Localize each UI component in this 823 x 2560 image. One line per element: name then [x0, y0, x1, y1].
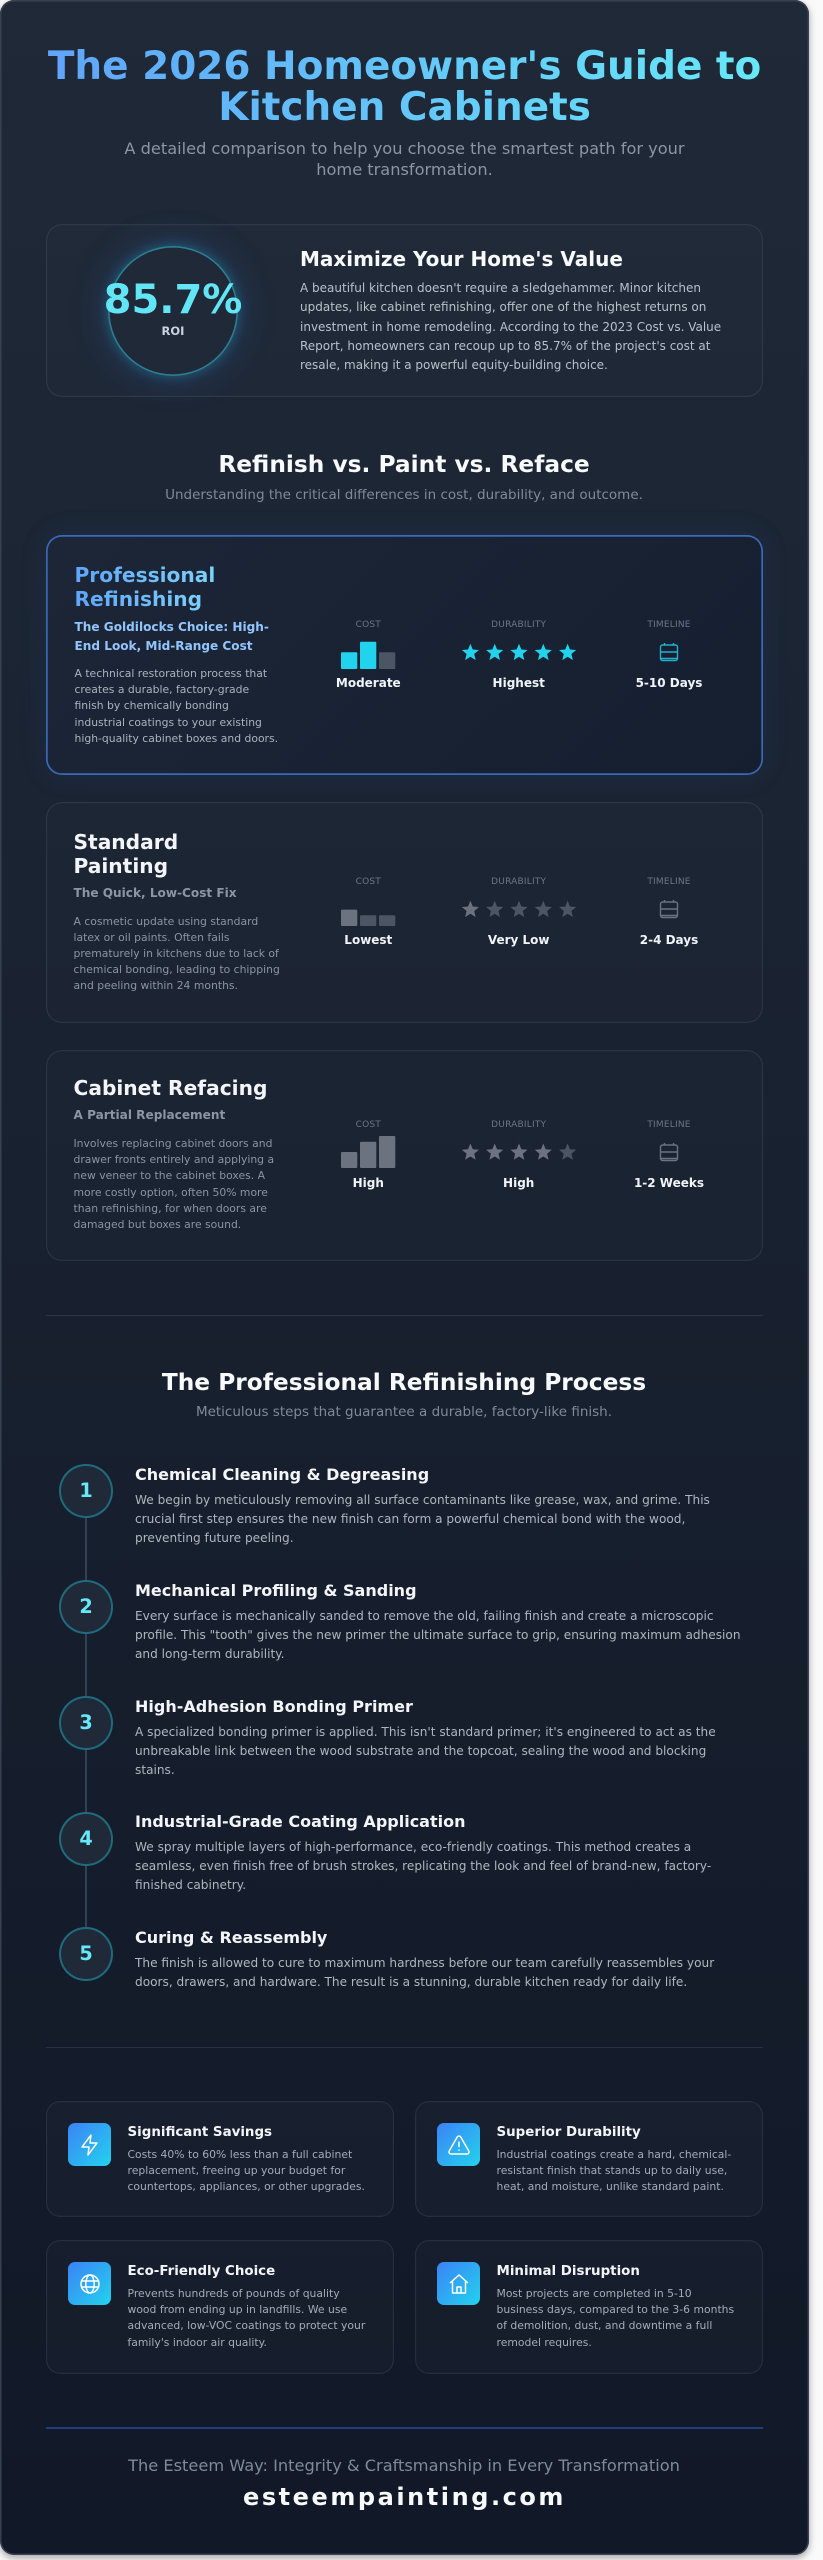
option description: high-quality cabinet boxes and doors.: [74, 732, 278, 745]
option description: new veneer to the cabinet boxes. A: [74, 1169, 265, 1182]
panel: superior durability: [415, 2101, 763, 2217]
heading: comparison: Refinish vs. Paint vs. Reface: [218, 451, 590, 478]
benefit title: Minimal Disruption: [496, 2264, 640, 2279]
benefit text: of demolition, dust, and downtime a full: [496, 2319, 712, 2332]
step text: [135, 1724, 716, 1776]
metric: cost: High: [353, 1176, 384, 1190]
benefit text: business days, compared to the 3-6 months: [496, 2303, 734, 2316]
benefit text: [128, 2148, 365, 2193]
benefit text: Industrial coatings create a hard, chemical-: [496, 2148, 731, 2161]
benefit text: resistant finish that stands up to daily use,: [496, 2164, 727, 2177]
step text: We spray multiple layers of high-performance, eco-friendly coatings. This method creates a: [135, 1840, 691, 1854]
option description: [74, 1137, 274, 1231]
option description: A cosmetic update using standard: [74, 915, 258, 928]
step text: unbreakable link between the wood substrate and the topcoat, sealing the wood and blocking: [135, 1744, 706, 1758]
heading: process: The Professional Refinishing Process: [162, 1369, 646, 1396]
metric: cost: [341, 1120, 396, 1190]
metric: durability: High: [503, 1176, 534, 1190]
option tagline: End Look, Mid-Range Cost: [74, 638, 253, 652]
ROI text: resale, making it a powerful equity-building choice.: [300, 358, 608, 372]
subtitle: home transformation.: [316, 160, 493, 178]
metric: timeline: 5-10 Days: [636, 676, 702, 690]
step title: High-Adhesion Bonding Primer: [135, 1697, 413, 1716]
metric: cost: Moderate: [336, 676, 401, 690]
ROI circle: [108, 246, 238, 376]
metric: durability: DURABILITY: [491, 620, 546, 630]
panel: minimal disruption: [415, 2240, 763, 2374]
metric: cost: COST: [356, 1120, 381, 1130]
step number: 3: [79, 1711, 93, 1734]
step 3: [59, 1696, 716, 1776]
metric: cost: COST: [356, 877, 381, 887]
option description: drawer fronts entirely and applying a: [74, 1153, 274, 1166]
ROI number: 85.7%: [104, 277, 242, 323]
option tagline: The Goldilocks Choice: High-: [74, 620, 269, 634]
option title: Painting: [74, 854, 168, 878]
panel: eco-friendly choice: [46, 2240, 394, 2374]
metric: durability: [462, 620, 576, 690]
step title: Curing & Reassembly: [135, 1928, 327, 1947]
benefit title: Eco-Friendly Choice: [128, 2264, 275, 2279]
metric: durability: DURABILITY: [491, 877, 546, 887]
benefit text: Most projects are completed in 5-10: [496, 2287, 692, 2300]
step number: [59, 1464, 113, 1518]
option title: Standard: [74, 830, 178, 854]
icon: lightning bolt: [68, 2123, 111, 2166]
metric: cost: COST: [356, 620, 381, 630]
metric: durability: [462, 877, 576, 947]
option title: [74, 563, 215, 612]
metric: timeline: TIMELINE: [647, 877, 691, 887]
panel: cabinet refacing: [46, 1050, 763, 1260]
metric: durability: Very Low: [488, 933, 550, 947]
step text: [134, 1956, 714, 1988]
benefit text: replacement, freeing up your budget for: [128, 2164, 345, 2177]
metric: cost: Lowest: [344, 933, 392, 947]
ROI text: A beautiful kitchen doesn't require a sledgehammer. Minor kitchen: [300, 281, 701, 295]
step text: profile. This "tooth" gives the new primer the ultimate surface to grip, ensuring maximum adhesion: [135, 1628, 741, 1642]
step number: 5: [79, 1942, 93, 1965]
option description: [74, 667, 278, 745]
benefit text: [128, 2287, 366, 2349]
ROI label: ROI: [162, 324, 184, 338]
option tagline: A Partial Replacement: [74, 1108, 225, 1122]
step text: [135, 1840, 711, 1892]
option title: Refinishing: [74, 587, 202, 611]
benefit title: Significant Savings: [128, 2125, 272, 2140]
icon: globe: [68, 2262, 111, 2305]
step text: We begin by meticulously removing all surface contaminants like grease, wax, and grime. This: [135, 1492, 710, 1506]
step text: and long-term durability.: [135, 1646, 285, 1660]
metric: cost: [336, 620, 401, 690]
option description: and peeling within 24 months.: [74, 979, 238, 992]
panel: ROI: [46, 224, 763, 397]
benefit text: Costs 40% to 60% less than a full cabinet: [128, 2148, 352, 2161]
panel: standard painting: [46, 802, 763, 1022]
step title: Industrial-Grade Coating Application: [135, 1812, 465, 1831]
step text: Every surface is mechanically sanded to remove the old, failing finish and create a microscopic: [135, 1608, 714, 1622]
title: [1, 46, 809, 128]
step number: 2: [79, 1595, 93, 1618]
title: Kitchen Cabinets: [218, 85, 591, 130]
option description: [74, 915, 280, 992]
benefit text: heat, and moisture, unlike standard paint.: [496, 2180, 724, 2193]
step 5: [59, 1927, 714, 1988]
metric: timeline: TIMELINE: [647, 1120, 691, 1130]
step text: [135, 1608, 741, 1660]
step text: The finish is allowed to cure to maximum hardness before our team carefully reassembles your: [135, 1956, 714, 1970]
ROI text: [300, 281, 721, 372]
step text: A specialized bonding primer is applied. This isn't standard primer; it's engineered to act as the: [135, 1724, 716, 1738]
icon: house: [437, 2262, 480, 2305]
option tagline: The Quick, Low-Cost Fix: [74, 886, 237, 900]
step number: [59, 1696, 113, 1750]
footer tagline: The Esteem Way: Integrity & Craftsmanship in Every Transformation: [128, 2456, 680, 2475]
benefit text: family's indoor air quality.: [128, 2336, 267, 2349]
footer website: esteempainting.com: [243, 2483, 566, 2511]
metric: timeline: TIMELINE: [647, 620, 691, 630]
title: The 2026 Homeowner's Guide to: [48, 44, 761, 89]
subtitle: A detailed comparison to help you choose the smartest path for your: [124, 138, 685, 158]
benefit text: advanced, low-VOC coatings to protect your: [128, 2319, 365, 2332]
subheading: comparison: Understanding the critical differences in cost, durability, and outcome.: [165, 487, 643, 503]
step 1: [59, 1464, 710, 1544]
option description: chemical bonding, leading to chipping: [74, 963, 280, 976]
option description: prematurely in kitchens due to lack of: [74, 947, 279, 960]
benefit title: Superior Durability: [496, 2125, 641, 2140]
step text: stains.: [135, 1762, 175, 1776]
icon: warning triangle: [437, 2123, 480, 2166]
metric: timeline: [634, 1120, 704, 1190]
metric: timeline: [636, 620, 702, 690]
ROI text: investment in home remodeling. According to the 2023 Cost vs. Value: [300, 320, 721, 334]
option description: finish by chemically bonding: [74, 699, 229, 712]
step number: [59, 1812, 113, 1866]
step 4: [59, 1812, 711, 1892]
metric: durability: [462, 1120, 576, 1190]
option description: creates a durable, factory-grade: [74, 683, 249, 696]
metric: durability: DURABILITY: [491, 1120, 546, 1130]
benefit text: remodel requires.: [496, 2336, 592, 2349]
option title: Professional: [74, 563, 215, 587]
step text: preventing future peeling.: [135, 1530, 294, 1544]
step text: crucial first step ensures the new finish can form a powerful chemical bond with the wood,: [135, 1512, 685, 1526]
ROI heading: Maximize Your Home's Value: [300, 247, 623, 271]
option description: than refinishing, for when doors are: [74, 1202, 267, 1215]
option description: industrial coatings to your existing: [74, 716, 262, 729]
metric: cost: [341, 877, 396, 947]
option tagline: [74, 620, 269, 652]
step text: [135, 1492, 710, 1544]
option description: damaged but boxes are sound.: [74, 1218, 241, 1231]
step number: 1: [79, 1479, 93, 1502]
ROI text: updates, like cabinet refinishing, offer one of the highest returns on: [300, 300, 706, 314]
timeline connector line: [85, 1510, 87, 1940]
step text: seamless, even finish free of brush strokes, replicating the look and feel of brand-new, factory-: [135, 1859, 711, 1873]
option description: latex or oil paints. Often fails: [74, 931, 229, 944]
option description: more costly option, often 50% more: [74, 1186, 268, 1198]
step number: [59, 1927, 113, 1981]
step title: Mechanical Profiling & Sanding: [135, 1581, 417, 1600]
step text: doors, drawers, and hardware. The result is a stunning, durable kitchen ready for daily life.: [135, 1974, 687, 1988]
step title: Chemical Cleaning & Degreasing: [135, 1465, 429, 1484]
benefit text: Prevents hundreds of pounds of quality: [128, 2287, 340, 2300]
metric: timeline: [640, 877, 698, 947]
option title: [74, 830, 178, 878]
benefit text: [496, 2287, 734, 2349]
subtitle: [124, 138, 685, 178]
ROI text: Report, homeowners can recoup up to 85.7% of the project's cost at: [300, 339, 710, 353]
step 2: [59, 1580, 741, 1660]
metric: durability: Highest: [493, 676, 545, 690]
step text: finished cabinetry.: [135, 1878, 246, 1892]
metric: timeline: 2-4 Days: [640, 933, 698, 947]
option description: Involves replacing cabinet doors and: [74, 1137, 272, 1150]
benefit text: countertops, appliances, or other upgrades.: [128, 2180, 365, 2193]
option title: Cabinet Refacing: [74, 1076, 267, 1100]
benefit text: wood from ending up in landfills. We use: [128, 2303, 347, 2316]
step number: 4: [79, 1826, 93, 1850]
option description: A technical restoration process that: [74, 667, 267, 680]
panel: significant savings: [46, 2101, 394, 2217]
step number: [59, 1580, 113, 1634]
metric: timeline: 1-2 Weeks: [634, 1176, 704, 1190]
benefit text: [496, 2148, 731, 2193]
panel: professional refinishing: [46, 535, 763, 775]
subheading: process: Meticulous steps that guarantee a durable, factory-like finish.: [196, 1404, 612, 1420]
